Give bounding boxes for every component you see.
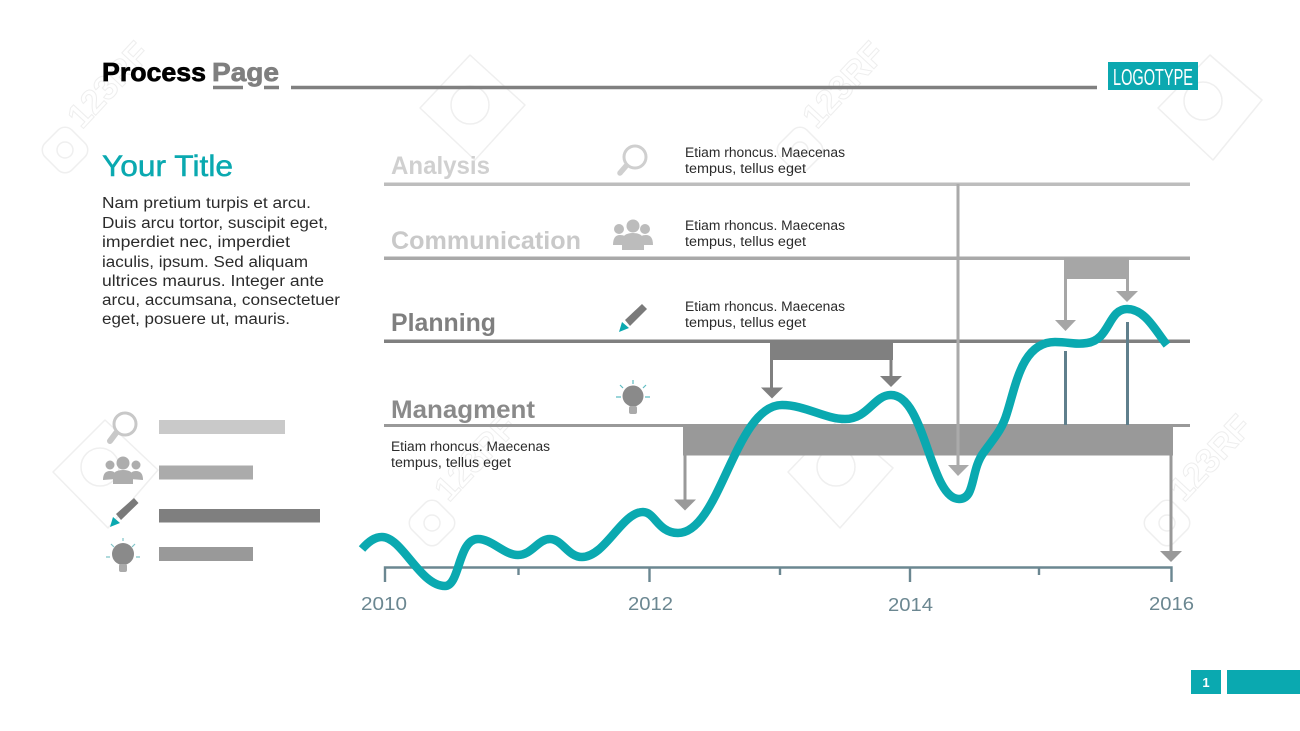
page heading: Page <box>212 57 279 87</box>
page heading <box>102 57 279 87</box>
icon: pencil <box>619 304 647 332</box>
row line: planning <box>384 340 1190 343</box>
infographic canvas: 123RF <box>795 35 892 135</box>
year labels: 2010 <box>361 594 407 614</box>
icon: pencil legend <box>110 498 138 527</box>
vertical drop lines <box>1066 322 1128 425</box>
row: management <box>384 380 1190 470</box>
planning span bar with arrows <box>761 341 902 398</box>
heading: management: Managment <box>391 396 536 424</box>
logotype badge: LOGOTYPE <box>1113 64 1193 90</box>
teal trend curve <box>362 309 1167 586</box>
row text: analysis: tempus, tellus eget <box>685 161 806 176</box>
left text panel <box>102 150 340 328</box>
row text: planning <box>685 299 845 330</box>
icon: magnifier legend <box>110 413 136 441</box>
row: analysis <box>384 145 1190 186</box>
management span bar with arrows <box>674 425 1182 562</box>
panel body text: Duis arcu tortor, suscipit eget, <box>102 215 328 232</box>
icon: bulb <box>616 380 650 414</box>
panel body text: Nam pretium turpis et arcu. <box>102 195 311 212</box>
icon: bulb legend <box>106 538 140 572</box>
row text: analysis: Etiam rhoncus. Maecenas <box>685 145 845 160</box>
analysis arrow <box>948 184 969 476</box>
page number: 1 <box>1202 675 1210 690</box>
header <box>102 57 1198 90</box>
panel title: Your Title <box>102 150 233 183</box>
panel body text: imperdiet nec, imperdiet <box>102 234 291 251</box>
row text: analysis <box>685 145 845 176</box>
timeline axis <box>361 568 1194 615</box>
bar: analysis <box>159 420 285 434</box>
row text: communication: Etiam rhoncus. Maecenas <box>685 218 845 233</box>
year labels: 2012 <box>628 594 673 614</box>
row line: analysis <box>384 182 1190 186</box>
row text: planning: Etiam rhoncus. Maecenas <box>685 299 845 314</box>
row text: management: tempus, tellus eget <box>391 455 511 470</box>
infographic canvas: 123RF <box>60 35 157 135</box>
year labels <box>361 594 1194 615</box>
row line: management <box>384 424 1190 427</box>
row text: management <box>391 439 550 470</box>
heading: planning: Planning <box>391 309 496 337</box>
row: communication <box>384 218 1190 260</box>
panel body text <box>102 195 340 328</box>
row text: planning: tempus, tellus eget <box>685 315 806 330</box>
panel body text: ultrices maurus. Integer ante <box>102 273 324 290</box>
icon: magnifier <box>620 146 646 173</box>
icon: people legend <box>103 456 143 484</box>
logotype badge <box>1108 62 1198 90</box>
year labels: 2014 <box>888 595 933 615</box>
row text: communication <box>685 218 845 249</box>
axis line and ticks <box>385 568 1172 582</box>
left legend bar chart <box>103 413 320 572</box>
page number <box>1191 670 1300 694</box>
infographic canvas: 123RF <box>1162 408 1259 508</box>
heading: communication: Communication <box>391 227 581 255</box>
row text: communication: tempus, tellus eget <box>685 234 806 249</box>
heading: analysis: Analysis <box>391 152 490 180</box>
communication span bar with arrows <box>1055 258 1138 331</box>
row text: management: Etiam rhoncus. Maecenas <box>391 439 550 454</box>
bar: planning <box>159 509 320 522</box>
panel body text: eget, posuere ut, mauris. <box>102 311 290 328</box>
bar: communication <box>159 466 253 480</box>
row: planning <box>384 299 1190 343</box>
page heading: Process <box>102 57 206 87</box>
row line: communication <box>384 256 1190 260</box>
heading underline <box>213 86 1097 89</box>
year labels: 2016 <box>1149 594 1194 614</box>
bar: management <box>159 547 253 561</box>
infographic canvas: 123RF <box>427 408 524 508</box>
panel body text: iaculis, ipsum. Sed aliquam <box>102 254 308 271</box>
panel body text: arcu, accumsana, consectetuer <box>102 292 340 309</box>
icon: people <box>613 220 653 250</box>
